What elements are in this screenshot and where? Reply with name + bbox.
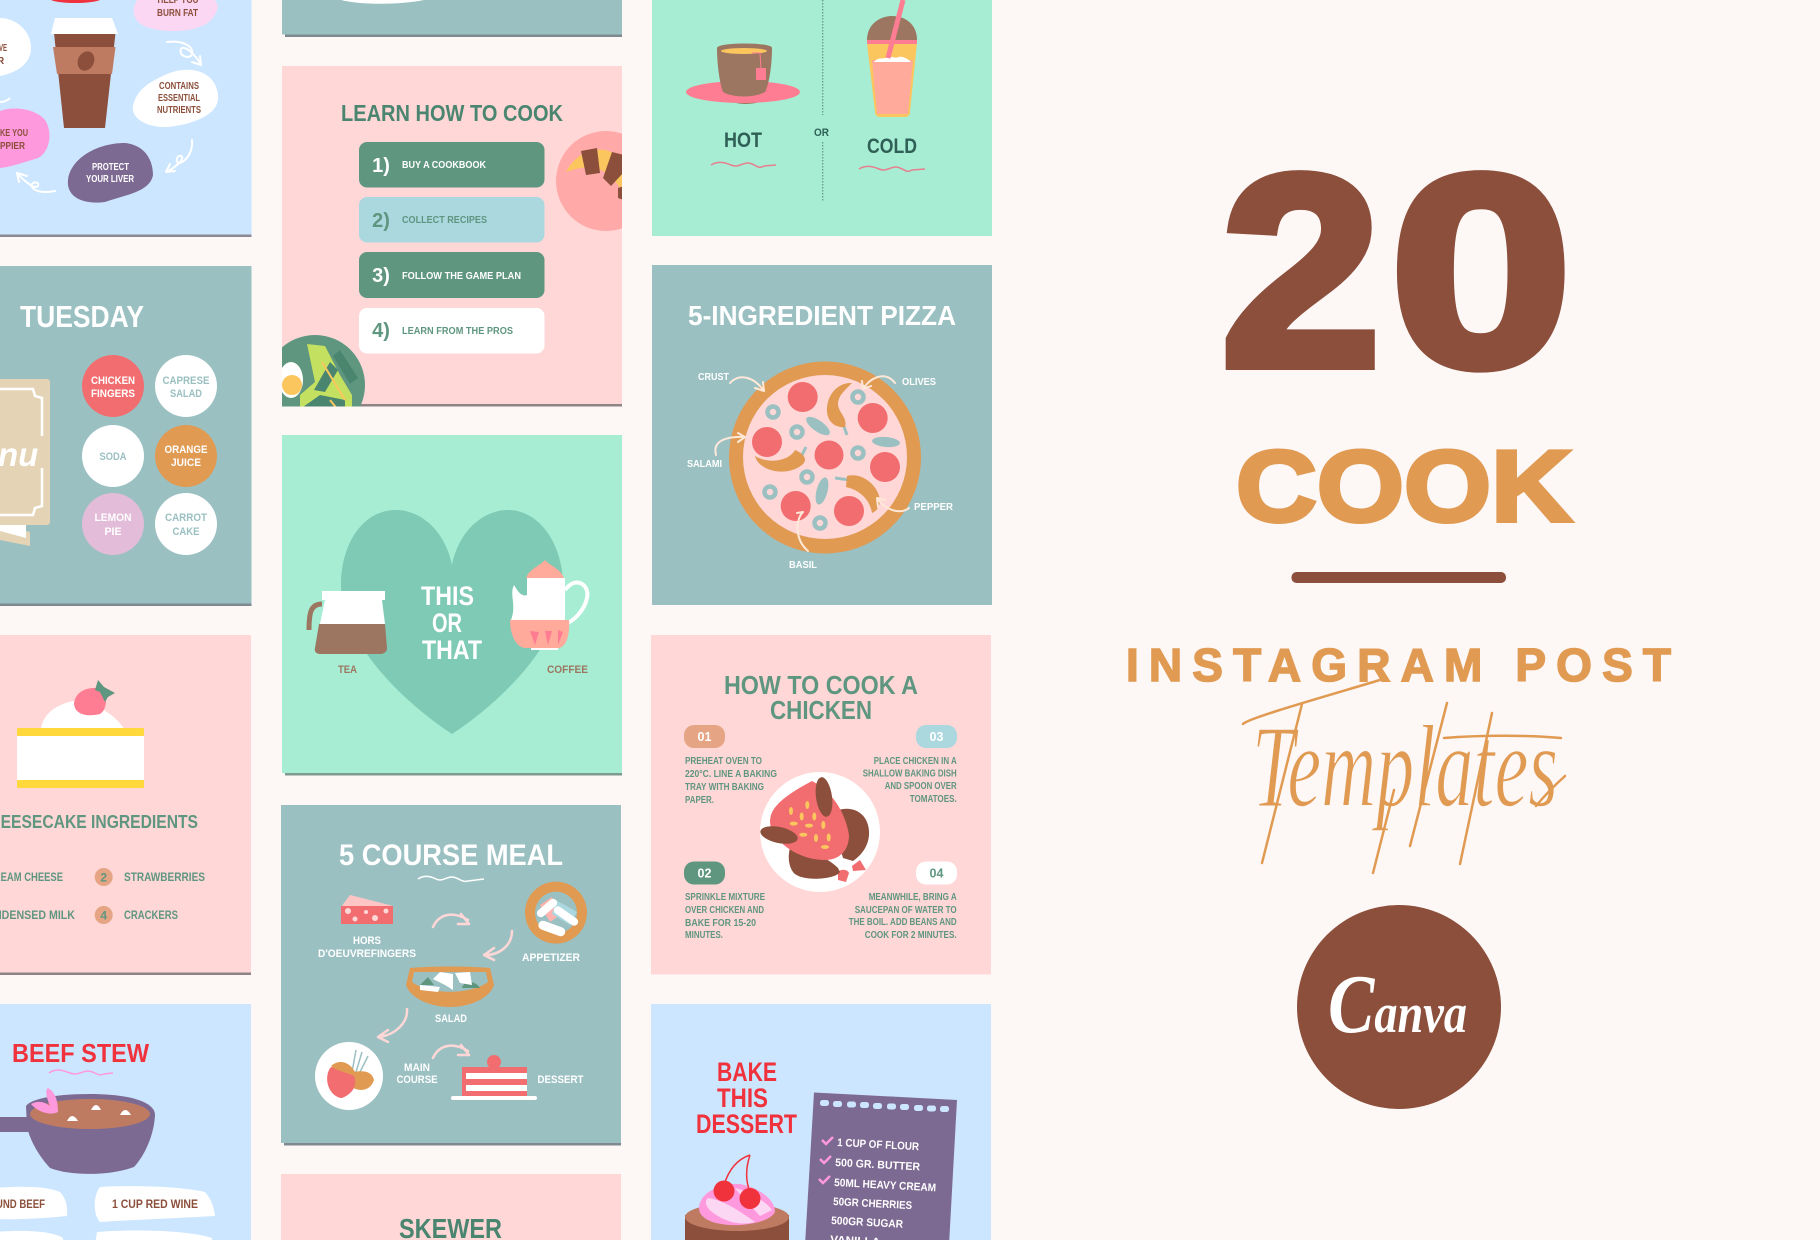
panel: 5 course meal card: D'OEUVREFINGERS <box>318 948 416 960</box>
panel: skewer card <box>281 1174 621 1240</box>
illustration: pizza <box>729 362 921 554</box>
step 02: SPRINKLE MIXTURE <box>685 892 765 903</box>
icon: tea carafe <box>309 591 387 654</box>
title: 20: 2 <box>1221 119 1381 423</box>
step 2 <box>359 197 544 242</box>
heading: how to cook a chicken <box>724 670 918 725</box>
step 3: FOLLOW THE GAME PLAN <box>402 270 521 282</box>
heading: this or that: OR <box>432 608 462 638</box>
heading: pizza: 5-INGREDIENT PIZZA <box>688 300 956 331</box>
icon: recipe note: 500GR SUGAR <box>831 1215 903 1231</box>
menu circles: CAPRESE <box>162 375 210 387</box>
arrow <box>433 914 469 927</box>
arrow <box>378 1009 407 1042</box>
step 2: 2) <box>372 210 390 232</box>
step 01: 01 <box>698 730 711 744</box>
icon: recipe note: 50ML HEAVY CREAM <box>834 1177 936 1194</box>
step 2: COLLECT RECIPES <box>402 214 487 226</box>
menu circles: PIE <box>104 526 122 538</box>
icon: salad plate <box>282 335 365 406</box>
panel: hot or cold card: HOT <box>724 129 762 152</box>
step 4 <box>359 308 544 354</box>
heading: this or that <box>421 581 482 665</box>
menu circles: FINGERS <box>91 388 135 400</box>
heading: how to cook a chicken: HOW TO COOK A <box>724 670 918 700</box>
menu circles: JUICE <box>171 457 201 469</box>
icon: appetizer plate <box>525 882 587 944</box>
icon: heart <box>341 510 563 734</box>
step 1: BUY A COOKBOOK <box>402 159 486 171</box>
panel: coffee benefits card: PROTECT <box>92 162 129 173</box>
icon: cheesecake slice <box>17 680 144 788</box>
panel: 5 course meal card <box>281 805 621 1146</box>
illustration: roast chicken <box>759 772 880 892</box>
panel: coffee benefits card: YOUR LIVER <box>86 174 135 185</box>
title: cook: COOK <box>1236 431 1572 543</box>
panel: coffee benefits card <box>0 0 252 237</box>
panel: coffee benefits card: ESSENTIAL <box>158 93 200 104</box>
heading: bake this dessert: DESSERT <box>696 1109 797 1139</box>
panel: 5 course meal card: MAIN <box>404 1062 430 1074</box>
panel: coffee benefits card: KE YOU <box>0 128 28 139</box>
step 03: SHALLOW BAKING DISH <box>863 768 957 780</box>
callout labels <box>687 372 954 571</box>
step 1 <box>359 142 544 188</box>
callout labels: BASIL <box>789 560 817 571</box>
step 03: 03 <box>930 730 943 744</box>
heading: this or that: THAT <box>422 635 482 665</box>
panel: 5 course meal card: DESSERT <box>538 1074 584 1086</box>
step 04: MEANWHILE, BRING A <box>869 892 957 903</box>
panel: hot or cold card: COLD <box>867 135 917 158</box>
callout labels: CRUST <box>698 372 729 383</box>
subtitle: instagram post: INSTAGRAM POST <box>1126 639 1671 691</box>
arrow <box>484 931 512 960</box>
menu circles: SALAD <box>170 388 202 400</box>
heading: bake this dessert: THIS <box>717 1083 768 1113</box>
panel: cheesecake ingredients card: 2 <box>100 870 107 884</box>
icon: recipe note: 50GR CHERRIES <box>833 1196 912 1212</box>
step 04: 04 <box>930 866 943 880</box>
panel: pizza card <box>652 265 992 605</box>
panel: top middle card <box>282 0 622 37</box>
step 01 <box>684 725 777 806</box>
heading: this or that: THIS <box>421 581 474 611</box>
panel: how to cook a chicken card <box>651 635 991 974</box>
ingredient pills: 1 CUP RED WINE <box>112 1197 198 1211</box>
icon: recipe note: 1 CUP OF FLOUR <box>837 1137 919 1153</box>
icon: menu card <box>0 379 50 546</box>
heading: 5 course meal: 5 COURSE MEAL <box>339 839 563 872</box>
step 4: 4) <box>372 320 390 342</box>
icon: takeaway coffee cup <box>51 18 118 128</box>
menu circles: CARROT <box>165 512 207 524</box>
icon: recipe note <box>805 1092 957 1240</box>
icon: layer cake <box>451 1055 537 1100</box>
panel: 5 course meal card: COURSE <box>396 1074 438 1086</box>
panel: 5 course meal card: HORS <box>353 935 381 947</box>
step 01: 220°C. LINE A BAKING <box>685 769 777 780</box>
icon: coffee pot <box>510 560 587 650</box>
panel: this or that card: TEA <box>338 664 357 676</box>
heading: bake this dessert <box>697 1062 797 1134</box>
step 03: PLACE CHICKEN IN A <box>874 756 957 767</box>
icon: cheese wedge <box>341 895 393 924</box>
icon: hot cup <box>686 44 800 104</box>
icon: recipe note: 500 GR. BUTTER <box>835 1157 920 1173</box>
step 04 <box>849 862 957 941</box>
panel: coffee benefits card: PPIER <box>0 141 26 152</box>
step 02: OVER CHICKEN AND <box>685 905 764 916</box>
step 03: AND SPOON OVER <box>885 781 957 792</box>
ingredient pills <box>0 1186 215 1240</box>
step 04: THE BOIL. ADD BEANS AND <box>849 917 957 928</box>
panel: cheesecake ingredients card: CRACKERS <box>124 908 178 922</box>
step 01: PAPER. <box>685 795 714 806</box>
heading: beef stew: BEEF STEW <box>12 1038 149 1068</box>
step 02: 02 <box>698 866 711 880</box>
icon: main course plate <box>315 1042 383 1110</box>
panel: cheesecake ingredients card: STRAWBERRIES <box>124 870 205 884</box>
menu circles: CAKE <box>172 526 200 538</box>
heading: learn how to cook: LEARN HOW TO COOK <box>341 100 563 126</box>
step 01: TRAY WITH BAKING <box>685 782 764 793</box>
title: 20: 0 <box>1390 119 1572 423</box>
callout labels: SALAMI <box>687 459 722 470</box>
divider bar <box>1292 572 1506 583</box>
step 3: 3) <box>372 265 390 287</box>
icon: croissant plate <box>556 131 622 231</box>
panel: coffee benefits card: NUTRIENTS <box>157 105 201 116</box>
step 02: MINUTES. <box>685 930 723 941</box>
step 01: PREHEAT OVEN TO <box>685 756 762 767</box>
logo: Canva badge: Canva <box>1328 958 1467 1051</box>
panel: this or that card <box>282 435 622 776</box>
panel: cheesecake ingredients card <box>0 635 251 975</box>
script: templates: Templates <box>1252 701 1558 832</box>
panel: 5 course meal card: APPETIZER <box>522 952 580 964</box>
step 04: COOK FOR 2 MINUTES. <box>865 930 957 941</box>
step 1: 1) <box>372 155 390 177</box>
step 02 <box>684 862 765 941</box>
step 3 <box>359 252 544 298</box>
callout labels: PEPPER <box>914 502 954 513</box>
panel: beef stew card <box>0 1004 251 1240</box>
icon: stew pot <box>0 1088 155 1174</box>
callout labels: OLIVES <box>902 377 936 388</box>
step 04: SAUCEPAN OF WATER TO <box>855 905 957 916</box>
panel: this or that card: COFFEE <box>547 664 588 676</box>
menu circles: ORANGE <box>164 444 208 456</box>
logo: Canva badge <box>1297 905 1501 1109</box>
menu circles: LEMON <box>94 512 132 524</box>
menu circles: CHICKEN <box>91 375 135 387</box>
step 03 <box>863 725 957 805</box>
title: 20 <box>1221 119 1572 423</box>
arrow <box>433 1045 469 1058</box>
step 03: TOMATOES. <box>910 794 957 805</box>
panel: learn how to cook card <box>282 66 622 406</box>
icon: salad bowl <box>406 966 494 1007</box>
script: templates <box>1243 680 1565 873</box>
heading: Tuesday: TUESDAY <box>20 299 144 334</box>
heading: bake this dessert: BAKE <box>717 1057 777 1087</box>
step 02: BAKE FOR 15-20 <box>685 918 756 929</box>
panel: hot or cold card <box>652 0 992 236</box>
panel: hot or cold card: OR <box>814 127 829 139</box>
heading: how to cook a chicken: CHICKEN <box>770 695 872 725</box>
icon: cupcake <box>685 1155 789 1240</box>
step 4: LEARN FROM THE PROS <box>402 325 513 337</box>
divider <box>822 0 824 202</box>
panel: bake this dessert card <box>651 1004 991 1240</box>
menu circles: SODA <box>100 451 127 463</box>
icon: cold drink <box>867 0 917 117</box>
panel: Tuesday menu card <box>0 266 252 606</box>
panel: cheesecake ingredients card: 4 <box>100 908 107 922</box>
panel: 5 course meal card: SALAD <box>435 1013 467 1025</box>
menu circles <box>82 355 217 555</box>
panel: coffee benefits card: CONTAINS <box>159 81 199 92</box>
panel: coffee benefits card: BURN FAT <box>157 8 198 19</box>
